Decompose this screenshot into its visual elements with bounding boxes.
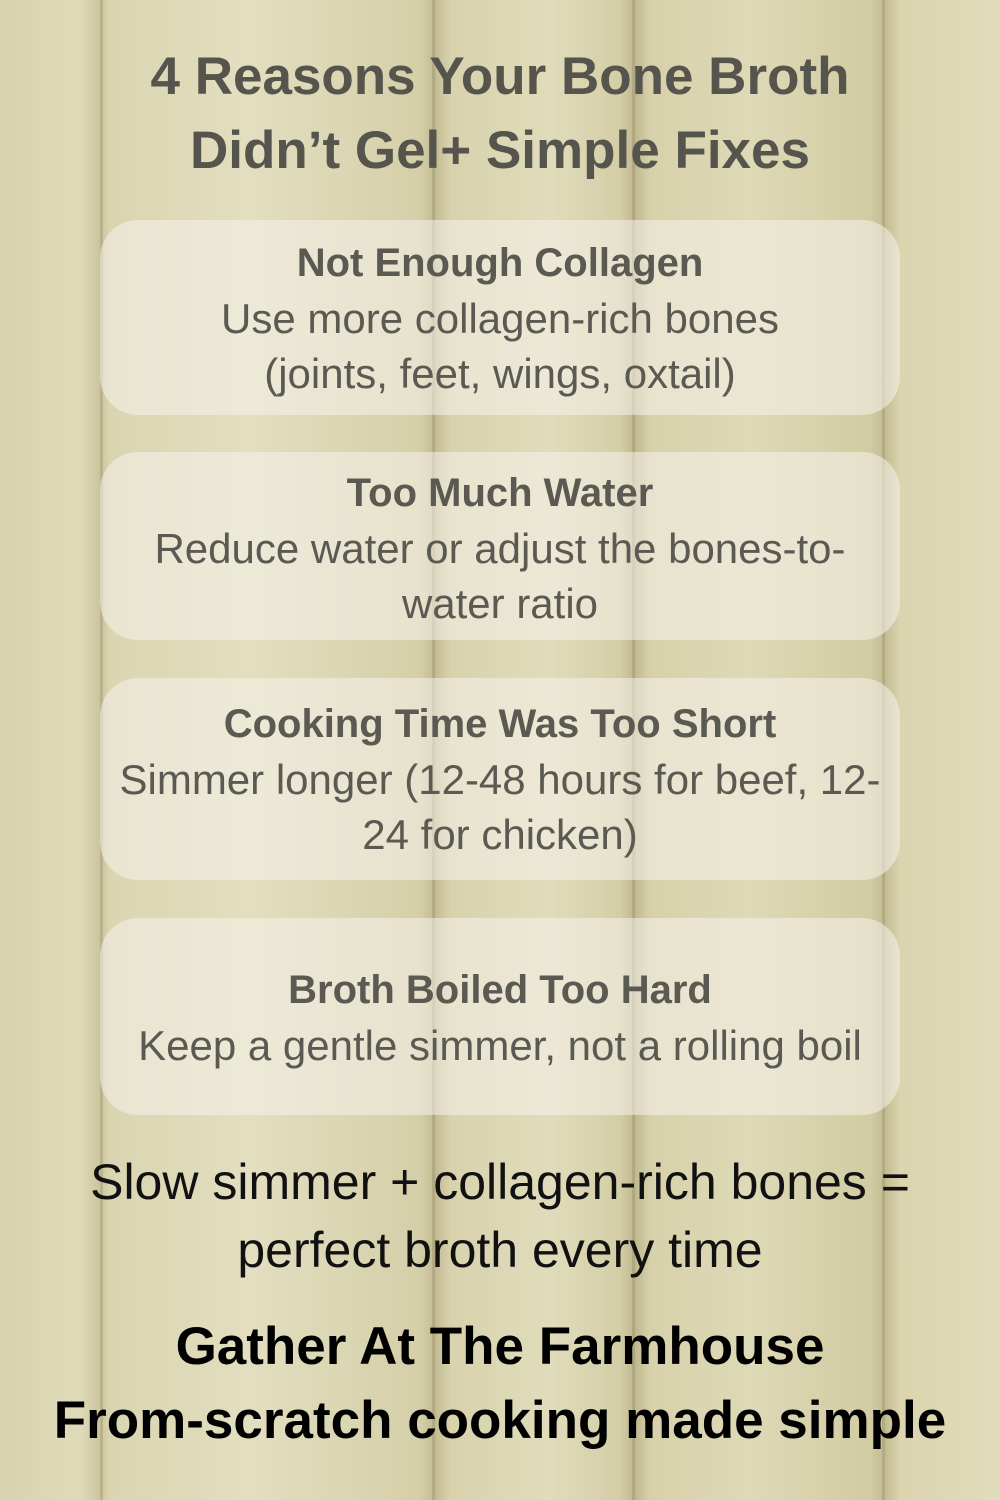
title: Didn’t Gel+ Simple Fixes (190, 121, 810, 180)
text: boil fix: Keep a gentle simmer, not a rolling boil (138, 1022, 862, 1069)
footer brand: From-scratch cooking made simple (54, 1391, 946, 1450)
summary text (90, 1154, 910, 1278)
text: water fix (154, 525, 846, 627)
heading: too much water: Too Much Water (347, 471, 653, 515)
panel: too much water (100, 452, 900, 640)
text: collagen fix: (joints, feet, wings, oxtail) (264, 350, 736, 397)
text: water fix: water ratio (402, 580, 598, 627)
panel: boiled too hard (100, 918, 900, 1115)
panel: not enough collagen (100, 220, 900, 415)
summary text: perfect broth every time (237, 1222, 763, 1278)
title: 4 Reasons Your Bone Broth (151, 47, 849, 106)
text: collagen fix: Use more collagen-rich bones (221, 295, 779, 342)
footer brand (54, 1317, 946, 1450)
panel: cooking time (100, 678, 900, 880)
text: time fix: 24 for chicken) (362, 811, 638, 858)
text: time fix (119, 756, 881, 858)
heading: not enough collagen: Not Enough Collagen (297, 241, 703, 285)
title (151, 47, 849, 180)
text: time fix: Simmer longer (12-48 hours for beef, 12- (119, 756, 881, 803)
text: water fix: Reduce water or adjust the bones-to- (154, 525, 846, 572)
heading: cooking time: Cooking Time Was Too Short (224, 702, 776, 746)
text: collagen fix (221, 295, 779, 397)
heading: boiled too hard: Broth Boiled Too Hard (288, 968, 712, 1012)
summary text: Slow simmer + collagen-rich bones = (90, 1154, 910, 1210)
footer brand: Gather At The Farmhouse (176, 1317, 824, 1376)
